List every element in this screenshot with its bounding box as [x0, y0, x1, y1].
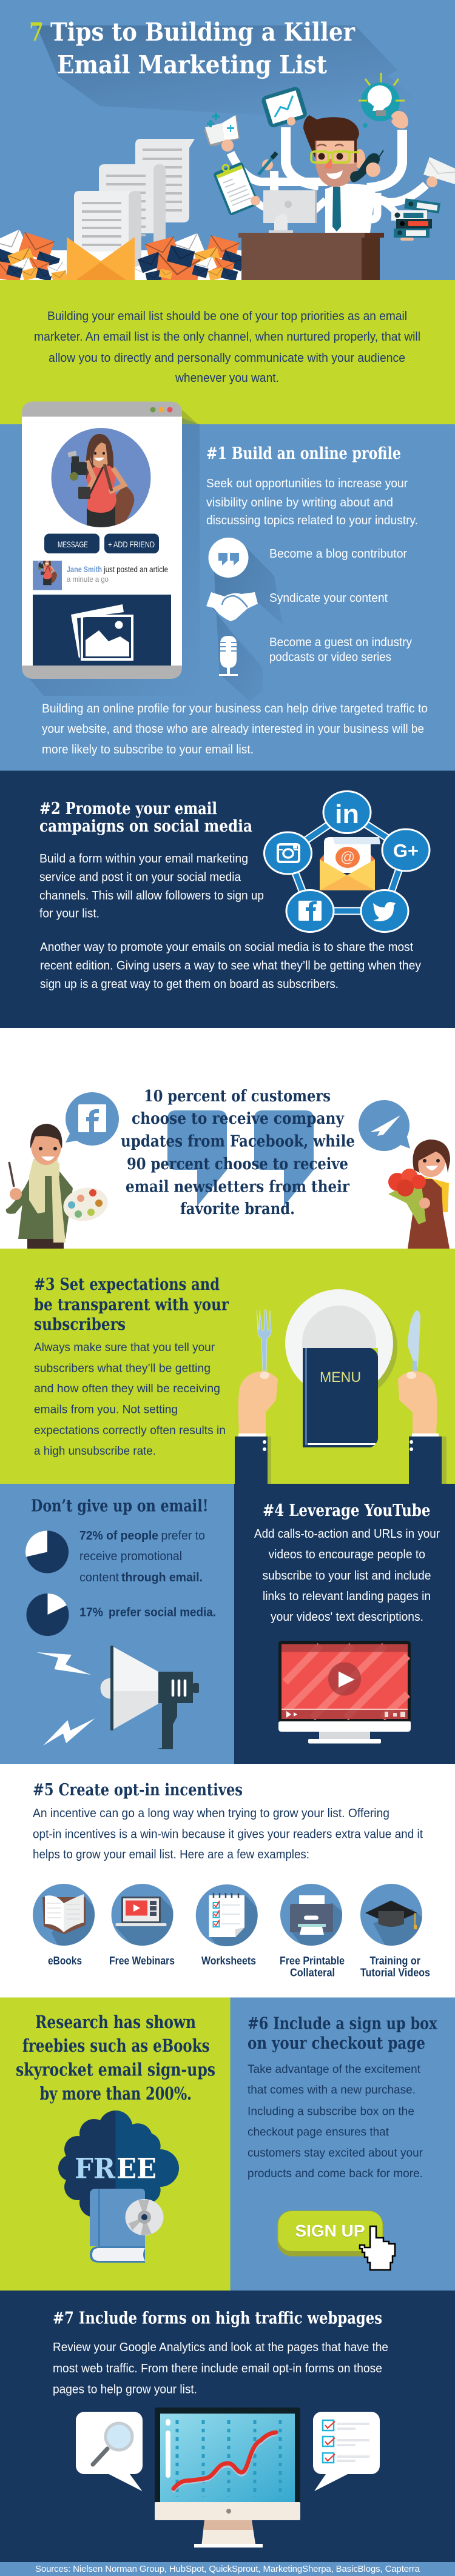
title: 7 [29, 18, 44, 47]
icon: google plus [382, 829, 430, 871]
paragraph: subscribers what they’ll be getting [34, 1361, 211, 1375]
quote text: 10 percent of customers [144, 1087, 331, 1106]
icon: paper scrolls [74, 139, 195, 267]
icon: monitor [263, 190, 317, 233]
icon: hand cursor [360, 2226, 395, 2270]
icon labels: Collateral [290, 1966, 335, 1978]
phone mockup shadow [22, 418, 200, 696]
research text: Research has shown [35, 2012, 196, 2032]
item text: guest: Become a guest on industry [269, 636, 412, 649]
paragraph 2 [42, 702, 428, 756]
paragraph: channels. This will allow followers to sign up [39, 889, 264, 903]
post image placeholder [33, 595, 171, 666]
button: sign up [277, 2211, 383, 2256]
icon: envelope piles [0, 229, 241, 280]
paragraph 2: more likely to subscribe to your email list. [42, 743, 254, 756]
paragraph: products and come back for more. [248, 2167, 423, 2180]
section 7 high traffic webpages [0, 2291, 455, 2562]
icon: quote bubble [209, 538, 249, 578]
stat text 72 percent: 72% of people [79, 1529, 158, 1543]
button: sign up: SIGN UP [295, 2222, 365, 2241]
paragraph: Review your Google Analytics and look at the pages that have the [53, 2341, 388, 2354]
stat text 72 percent [79, 1529, 205, 1584]
button message: MESSAGE [58, 539, 88, 549]
phone mockup [22, 401, 182, 679]
sources bar [0, 2562, 455, 2576]
title long shadow [36, 25, 414, 121]
pie chart 17 percent [27, 1593, 69, 1636]
item text: guest [269, 636, 412, 664]
post text: Jane Smith [67, 565, 102, 574]
paragraph: service and post it on your social media [39, 870, 241, 884]
section 1 build an online profile [0, 401, 455, 771]
paragraph: your videos' text descriptions. [271, 1610, 423, 1624]
button: sign up: SIGN UP [295, 2221, 365, 2240]
paragraph: opt-in incentives is a win-win because it gives your readers extra value and it [33, 1828, 423, 1841]
research text: skyrocket email sign-ups [16, 2060, 215, 2080]
section 6 sign up box [231, 1998, 455, 2291]
icon labels: Training or [370, 1955, 420, 1967]
icon: ebook [33, 1884, 95, 1946]
icon: email with at sign: @ [340, 849, 355, 866]
icon: facebook [286, 890, 334, 932]
post text: a minute a go [67, 575, 109, 584]
badge: free: EE [116, 2152, 157, 2184]
character: painter [6, 1124, 111, 1249]
paragraph: pages to help grow your list. [53, 2383, 197, 2397]
paragraph [39, 852, 264, 920]
paragraph 2 [40, 941, 421, 991]
paragraph: An incentive can go a long way when trying to grow your list. Offering [33, 1807, 389, 1820]
icon: megaphone [101, 1646, 199, 1749]
heading 6 [248, 2015, 437, 2053]
paragraph: Take advantage of the excitement [248, 2063, 421, 2076]
icon labels [48, 1955, 430, 1978]
icon: book [204, 113, 240, 152]
icon: lightbulb [359, 73, 408, 128]
quote text [121, 1087, 355, 1218]
paragraph: Including a subscribe box on the [248, 2104, 414, 2118]
intro paragraph: allow you to directly and personally communicate with your audience [49, 352, 405, 365]
stat text 17 percent: 17% [79, 1606, 103, 1620]
icon: envelope in hand [423, 157, 455, 187]
button add friend: + ADD FRIEND [108, 539, 155, 549]
icon: worksheet [195, 1884, 258, 1946]
icon: linkedin: in [335, 799, 359, 829]
badge: free [58, 2111, 179, 2226]
stat text 72 percent: through email. [121, 1571, 203, 1584]
icon: left hand [235, 1371, 278, 1484]
icon: handshake [206, 592, 258, 621]
intro paragraph [34, 310, 420, 385]
heading 1: #1 Build an online profile [206, 444, 401, 463]
paragraph [248, 2063, 423, 2180]
heading 3: be transparent with your [34, 1296, 229, 1314]
paragraph 2: Another way to promote your emails on social media is to share the most [40, 941, 413, 954]
icon: tablet chart [260, 85, 308, 128]
header section [0, 0, 455, 287]
paragraph: a high unsubscribe rate. [34, 1444, 156, 1458]
icon: video monitor [278, 1641, 411, 1743]
paragraph: links to relevant landing pages in [263, 1590, 431, 1603]
icon labels: Tutorial Videos [360, 1966, 430, 1978]
character: multitasking man [204, 73, 455, 241]
post thumbnail [33, 561, 62, 590]
icon: binders [391, 198, 440, 241]
stat text 72 percent: receive promotional [79, 1550, 182, 1563]
paragraph: subscribe to your list and include [262, 1569, 431, 1583]
pie chart 72 percent [25, 1530, 69, 1573]
quote text: choose to receive company [132, 1110, 345, 1128]
paragraph [33, 1807, 423, 1861]
paragraph: checkout page ensures that [248, 2125, 389, 2138]
heading 2: campaigns on social media [39, 817, 252, 836]
icon: microphone [219, 636, 238, 676]
icon: printer [280, 1884, 342, 1946]
heading 6: on your checkout page [248, 2034, 425, 2053]
paragraph: and how often they will be receiving [34, 1382, 220, 1395]
speech bubble: paper plane [359, 1100, 410, 1151]
icon: email with at sign [320, 837, 380, 890]
section 5 opt-in incentives [33, 1783, 430, 1976]
heading: Don’t give up on email! [31, 1497, 209, 1515]
flowers [388, 1169, 430, 1224]
icon: analytics monitor [155, 2407, 300, 2548]
paragraph: that comes with a new purchase. [248, 2083, 416, 2097]
icon labels: Free Webinars [109, 1955, 175, 1967]
badge: free: FR [75, 2152, 116, 2184]
heading 3: subscribers [34, 1315, 126, 1334]
item text: syndicate: Syndicate your content [269, 592, 388, 605]
stat text 72 percent: content [79, 1571, 119, 1584]
section 2 social media [0, 771, 455, 1028]
icon labels: eBooks [48, 1955, 82, 1967]
speech bubble: facebook [66, 1092, 119, 1146]
icon: google plus: G+ [393, 840, 419, 861]
icon: webinar laptop [112, 1884, 174, 1946]
paragraph: helps to grow your email list. Here are a few examples: [33, 1848, 309, 1861]
heading 2 [39, 799, 252, 836]
icon: lightning bolts [36, 1652, 95, 1746]
paragraph 2: your website, and those who are already interested in your business will be [42, 722, 424, 736]
paragraph 1: Seek out opportunities to increase your [206, 477, 408, 490]
stat text 17 percent: prefer social media. [109, 1606, 216, 1620]
section 3 set expectations [0, 1249, 455, 1484]
research text: by more than 200%. [40, 2083, 192, 2104]
quote text: favorite brand. [180, 1200, 295, 1218]
section: quote statistic [0, 1028, 455, 1249]
icon: ebook and cd [90, 2189, 164, 2263]
phone [350, 153, 380, 182]
paragraph 1: discussing topics related to your industry. [206, 514, 418, 527]
title: Email Marketing List [57, 50, 327, 79]
character: florist [388, 1140, 450, 1249]
icon: menu [303, 1348, 378, 1447]
paragraph 2: recent edition. Giving users a way to see what they’ll be getting when they [40, 959, 421, 972]
icon: big open envelope [67, 237, 135, 280]
sources bar: Sources: Nielsen Norman Group, HubSpot, QuickSprout, MarketingSherpa, BasicBlogs, Capterra [35, 2564, 420, 2574]
stat text 72 percent: prefer to [161, 1529, 205, 1543]
icon: linkedin [323, 792, 371, 833]
section: research freebies [0, 1998, 231, 2291]
research text [16, 2012, 215, 2104]
item text: blog contributor: Become a blog contributor [269, 547, 407, 561]
icon: menu: MENU [320, 1369, 361, 1386]
icon: pen in hand [258, 153, 277, 175]
icon: twitter [361, 890, 408, 932]
heading 3: #3 Set expectations and [34, 1275, 220, 1294]
palette [60, 1184, 111, 1225]
paragraph [34, 1341, 226, 1458]
section: dont give up on email [0, 1484, 234, 1764]
heading 4: #4 Leverage YouTube [263, 1501, 431, 1520]
profile avatar [51, 428, 150, 533]
paragraph [254, 1527, 440, 1624]
icon: knife [408, 1310, 420, 1373]
button add friend [104, 533, 159, 553]
paragraph: emails from you. Not setting [34, 1403, 178, 1416]
post text: just posted an article [103, 565, 168, 574]
button message [44, 533, 99, 553]
paragraph: customers stay excited about your [248, 2146, 423, 2160]
quote text: 90 percent choose to receive [127, 1155, 348, 1173]
paragraph [53, 2341, 388, 2397]
icon: quote marks [167, 1110, 314, 1206]
speech bubble: checklist [313, 2412, 380, 2491]
research text: freebies such as eBooks [22, 2035, 210, 2056]
intro paragraph: marketer. An email list is the only channel, when nurtured properly, that will [34, 330, 420, 344]
icon: right hand [398, 1371, 447, 1484]
paragraph: for your list. [39, 907, 99, 920]
item shadows [212, 544, 283, 701]
heading 3 [34, 1275, 229, 1334]
paragraph: videos to encourage people to [268, 1548, 425, 1561]
intro paragraph: Building your email list should be one of your top priorities as an email [47, 310, 407, 323]
icon: clipboard [213, 161, 260, 216]
item text: guest: podcasts or video series [269, 651, 391, 664]
social network diagram [265, 792, 430, 932]
heading 2: #2 Promote your email [39, 799, 217, 818]
icon: plate [285, 1289, 397, 1401]
title: Tips to Building a Killer [50, 18, 356, 47]
speech bubble: magnifier [76, 2412, 143, 2491]
quote text: updates from Facebook, while [121, 1132, 355, 1150]
paragraph 2: Building an online profile for your business can help drive targeted traffic to [42, 702, 428, 715]
quote text: email newsletters from their [126, 1178, 349, 1196]
icon: graduation cap [360, 1884, 422, 1946]
paragraph: most web traffic. From there include email opt-in forms on those [53, 2362, 382, 2375]
post text [67, 565, 168, 584]
white stripe behind envelopes [0, 250, 243, 280]
paragraph: expectations correctly often results in [34, 1424, 226, 1437]
paragraph 1 [206, 477, 418, 527]
paragraph: Add calls-to-action and URLs in your [254, 1527, 440, 1541]
intro paragraph: whenever you want. [175, 372, 279, 385]
man head [303, 115, 365, 187]
icon: fork [257, 1310, 271, 1371]
title [29, 18, 356, 79]
icon: desk [238, 233, 384, 280]
paragraph 2: sign up is a great way to get them on board as subscribers. [40, 978, 339, 991]
heading 5: #5 Create opt-in incentives [33, 1781, 243, 1800]
paragraph: Build a form within your email marketing [39, 852, 248, 866]
cd [125, 2199, 164, 2235]
paragraph: Always make sure that you tell your [34, 1341, 215, 1354]
section 4 youtube [234, 1484, 455, 1764]
paragraph 1: visibility online by writing about and [206, 496, 393, 509]
heading 7: #7 Include forms on high traffic webpages [53, 2309, 382, 2327]
icon: instagram [265, 832, 312, 874]
intro section [0, 280, 455, 424]
icon labels: Free Printable [280, 1955, 345, 1967]
icon labels: Worksheets [201, 1955, 256, 1967]
